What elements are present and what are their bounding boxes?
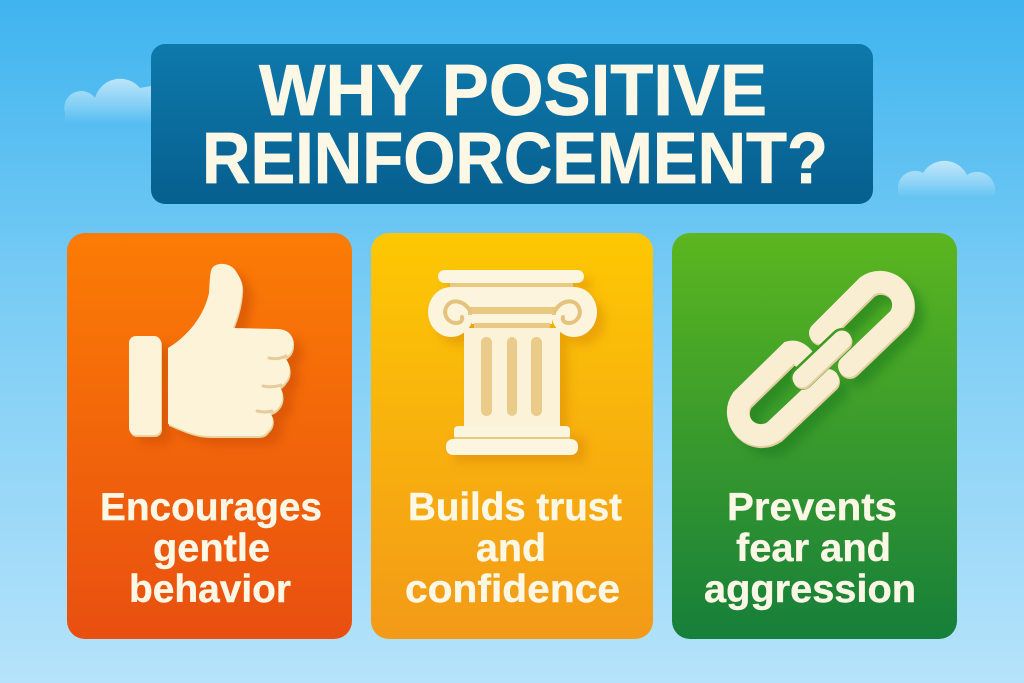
title line 1: WHY POSITIVE	[259, 51, 767, 131]
icon: cloud left	[64, 79, 152, 123]
title line 2: REINFORCEMENT?	[202, 119, 828, 199]
title banner	[151, 44, 873, 204]
label: builds	[405, 486, 622, 611]
icon: thumbs up	[129, 264, 303, 445]
label: encourages: gentle	[153, 527, 270, 570]
label: builds: confidence	[405, 568, 620, 611]
label: builds: Builds trust	[408, 486, 622, 529]
label: builds: and	[476, 527, 546, 570]
label: prevents	[704, 486, 916, 611]
label: encourages: Encourages	[100, 486, 322, 529]
panel: builds	[371, 233, 653, 639]
icon: chain link	[738, 282, 913, 445]
label: prevents: fear and	[736, 527, 891, 570]
panel: encourages	[67, 233, 352, 639]
icon: cloud right	[898, 161, 995, 197]
label: prevents: Prevents	[727, 486, 897, 529]
panel: prevents	[672, 233, 957, 639]
icon: column	[428, 270, 605, 463]
label: prevents: aggression	[704, 568, 916, 611]
label: encourages	[100, 486, 322, 611]
label: encourages: behavior	[129, 568, 291, 611]
